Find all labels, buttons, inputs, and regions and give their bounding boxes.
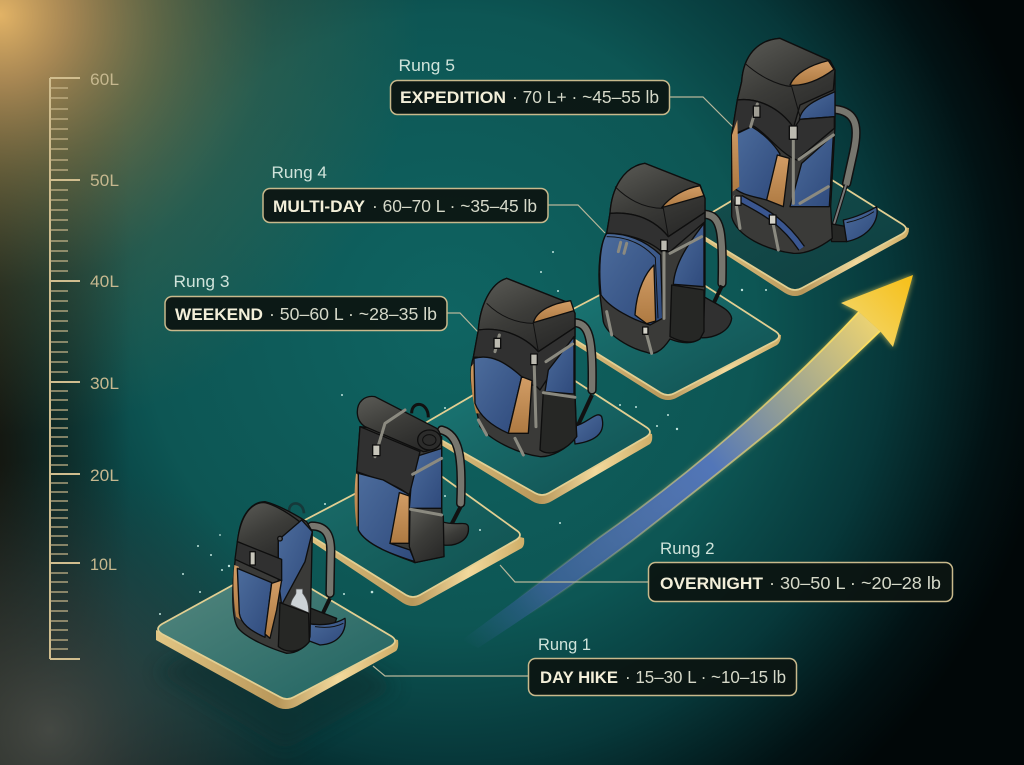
callout: rung 2: OVERNIGHT (660, 574, 764, 593)
sparkles (159, 251, 767, 615)
backpack: rung 1 day hike (233, 502, 345, 653)
backpack: rung 5 expedition (732, 38, 877, 253)
callout: rung 4: · 60–70 L · ~35–45 lb (372, 196, 537, 216)
callout: rung 2: Rung 2 (660, 540, 714, 558)
callout: rung 5: Rung 5 (398, 57, 455, 75)
volume ruler: 10L (90, 555, 117, 574)
volume ruler: 50L (90, 171, 119, 190)
platform: rung 2 (299, 463, 524, 606)
backpack: rung 4 multi-day (599, 163, 732, 353)
callout: rung 5: EXPEDITION (400, 88, 506, 107)
volume ruler: 30L (90, 374, 119, 393)
callout: rung 1: · 15–30 L · ~10–15 lb (625, 667, 786, 687)
platform: rung 5 (692, 162, 909, 296)
callout: rung 3: · 50–60 L · ~28–35 lb (269, 304, 437, 324)
callout: rung 2 (648, 540, 952, 602)
volume ruler: 60L (90, 70, 119, 89)
callout: rung 5 (390, 57, 670, 114)
callout: rung 5: · 70 L+ · ~45–55 lb (512, 87, 659, 107)
callout: rung 3: WEEKEND (175, 305, 263, 324)
backpack: rung 2 overnight (355, 396, 468, 563)
callout: rung 1: Rung 1 (538, 636, 591, 654)
callout: rung 4: MULTI-DAY (273, 197, 366, 216)
platform: rung 3 (423, 360, 652, 504)
growth arrow (462, 275, 913, 648)
callout: rung 4: Rung 4 (272, 164, 327, 182)
callout: rung 3 (165, 273, 447, 330)
volume ruler: 40L (90, 272, 119, 291)
callout: rung 1 (528, 636, 796, 696)
volume ruler: 20L (90, 466, 119, 485)
callout: rung 2: · 30–50 L · ~20–28 lb (769, 573, 941, 593)
platform: rung 1 (156, 566, 398, 709)
callout: rung 1: DAY HIKE (540, 668, 618, 687)
platform: rung 4 (552, 263, 781, 400)
platform reflection (157, 606, 397, 750)
callout: rung 4 (263, 164, 548, 222)
connector lines (373, 97, 733, 676)
callout: rung 3: Rung 3 (174, 273, 230, 291)
volume ruler (50, 70, 119, 659)
backpack: rung 3 weekend (471, 278, 603, 457)
